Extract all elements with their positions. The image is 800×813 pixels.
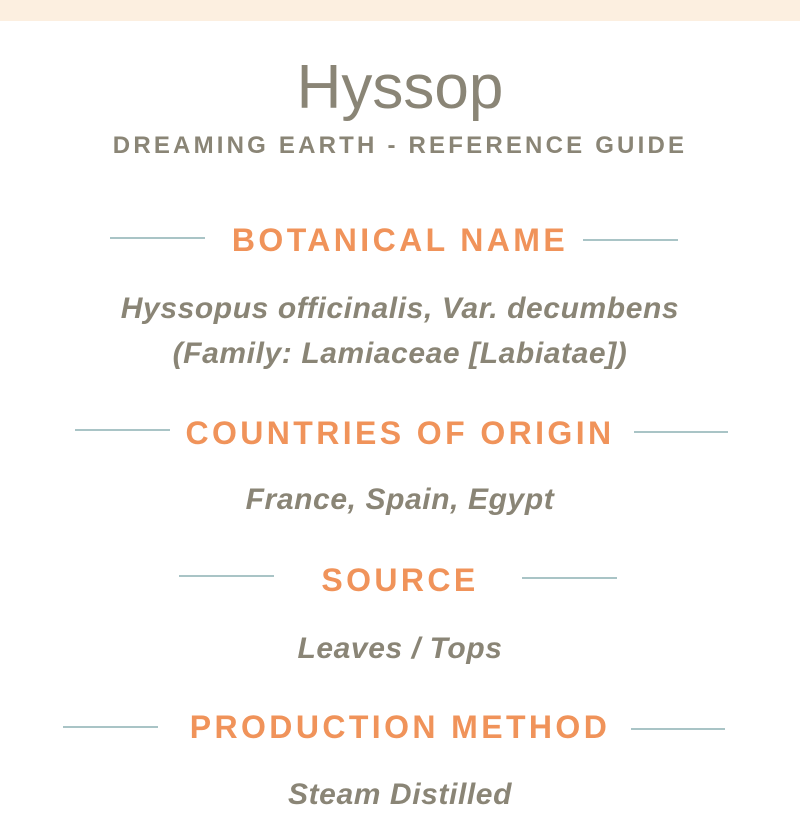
text: botanical name	[121, 292, 679, 370]
text: countries: France, Spain, Egypt	[246, 483, 554, 516]
title: Hyssop	[297, 53, 503, 122]
text: production method: Steam Distilled	[288, 778, 512, 811]
heading: countries of origin: COUNTRIES OF ORIGIN	[185, 415, 615, 451]
text: botanical name: (Family: Lamiaceae [Labiatae])	[173, 337, 627, 370]
heading: production method: PRODUCTION METHOD	[190, 709, 610, 745]
text: botanical name: Hyssopus officinalis, Var. decumbens	[121, 292, 679, 325]
heading: botanical name: BOTANICAL NAME	[232, 222, 568, 258]
text: source: Leaves / Tops	[297, 632, 503, 665]
heading: source: SOURCE	[321, 562, 479, 598]
top band	[0, 0, 800, 21]
subtitle: DREAMING EARTH - REFERENCE GUIDE	[113, 132, 687, 159]
